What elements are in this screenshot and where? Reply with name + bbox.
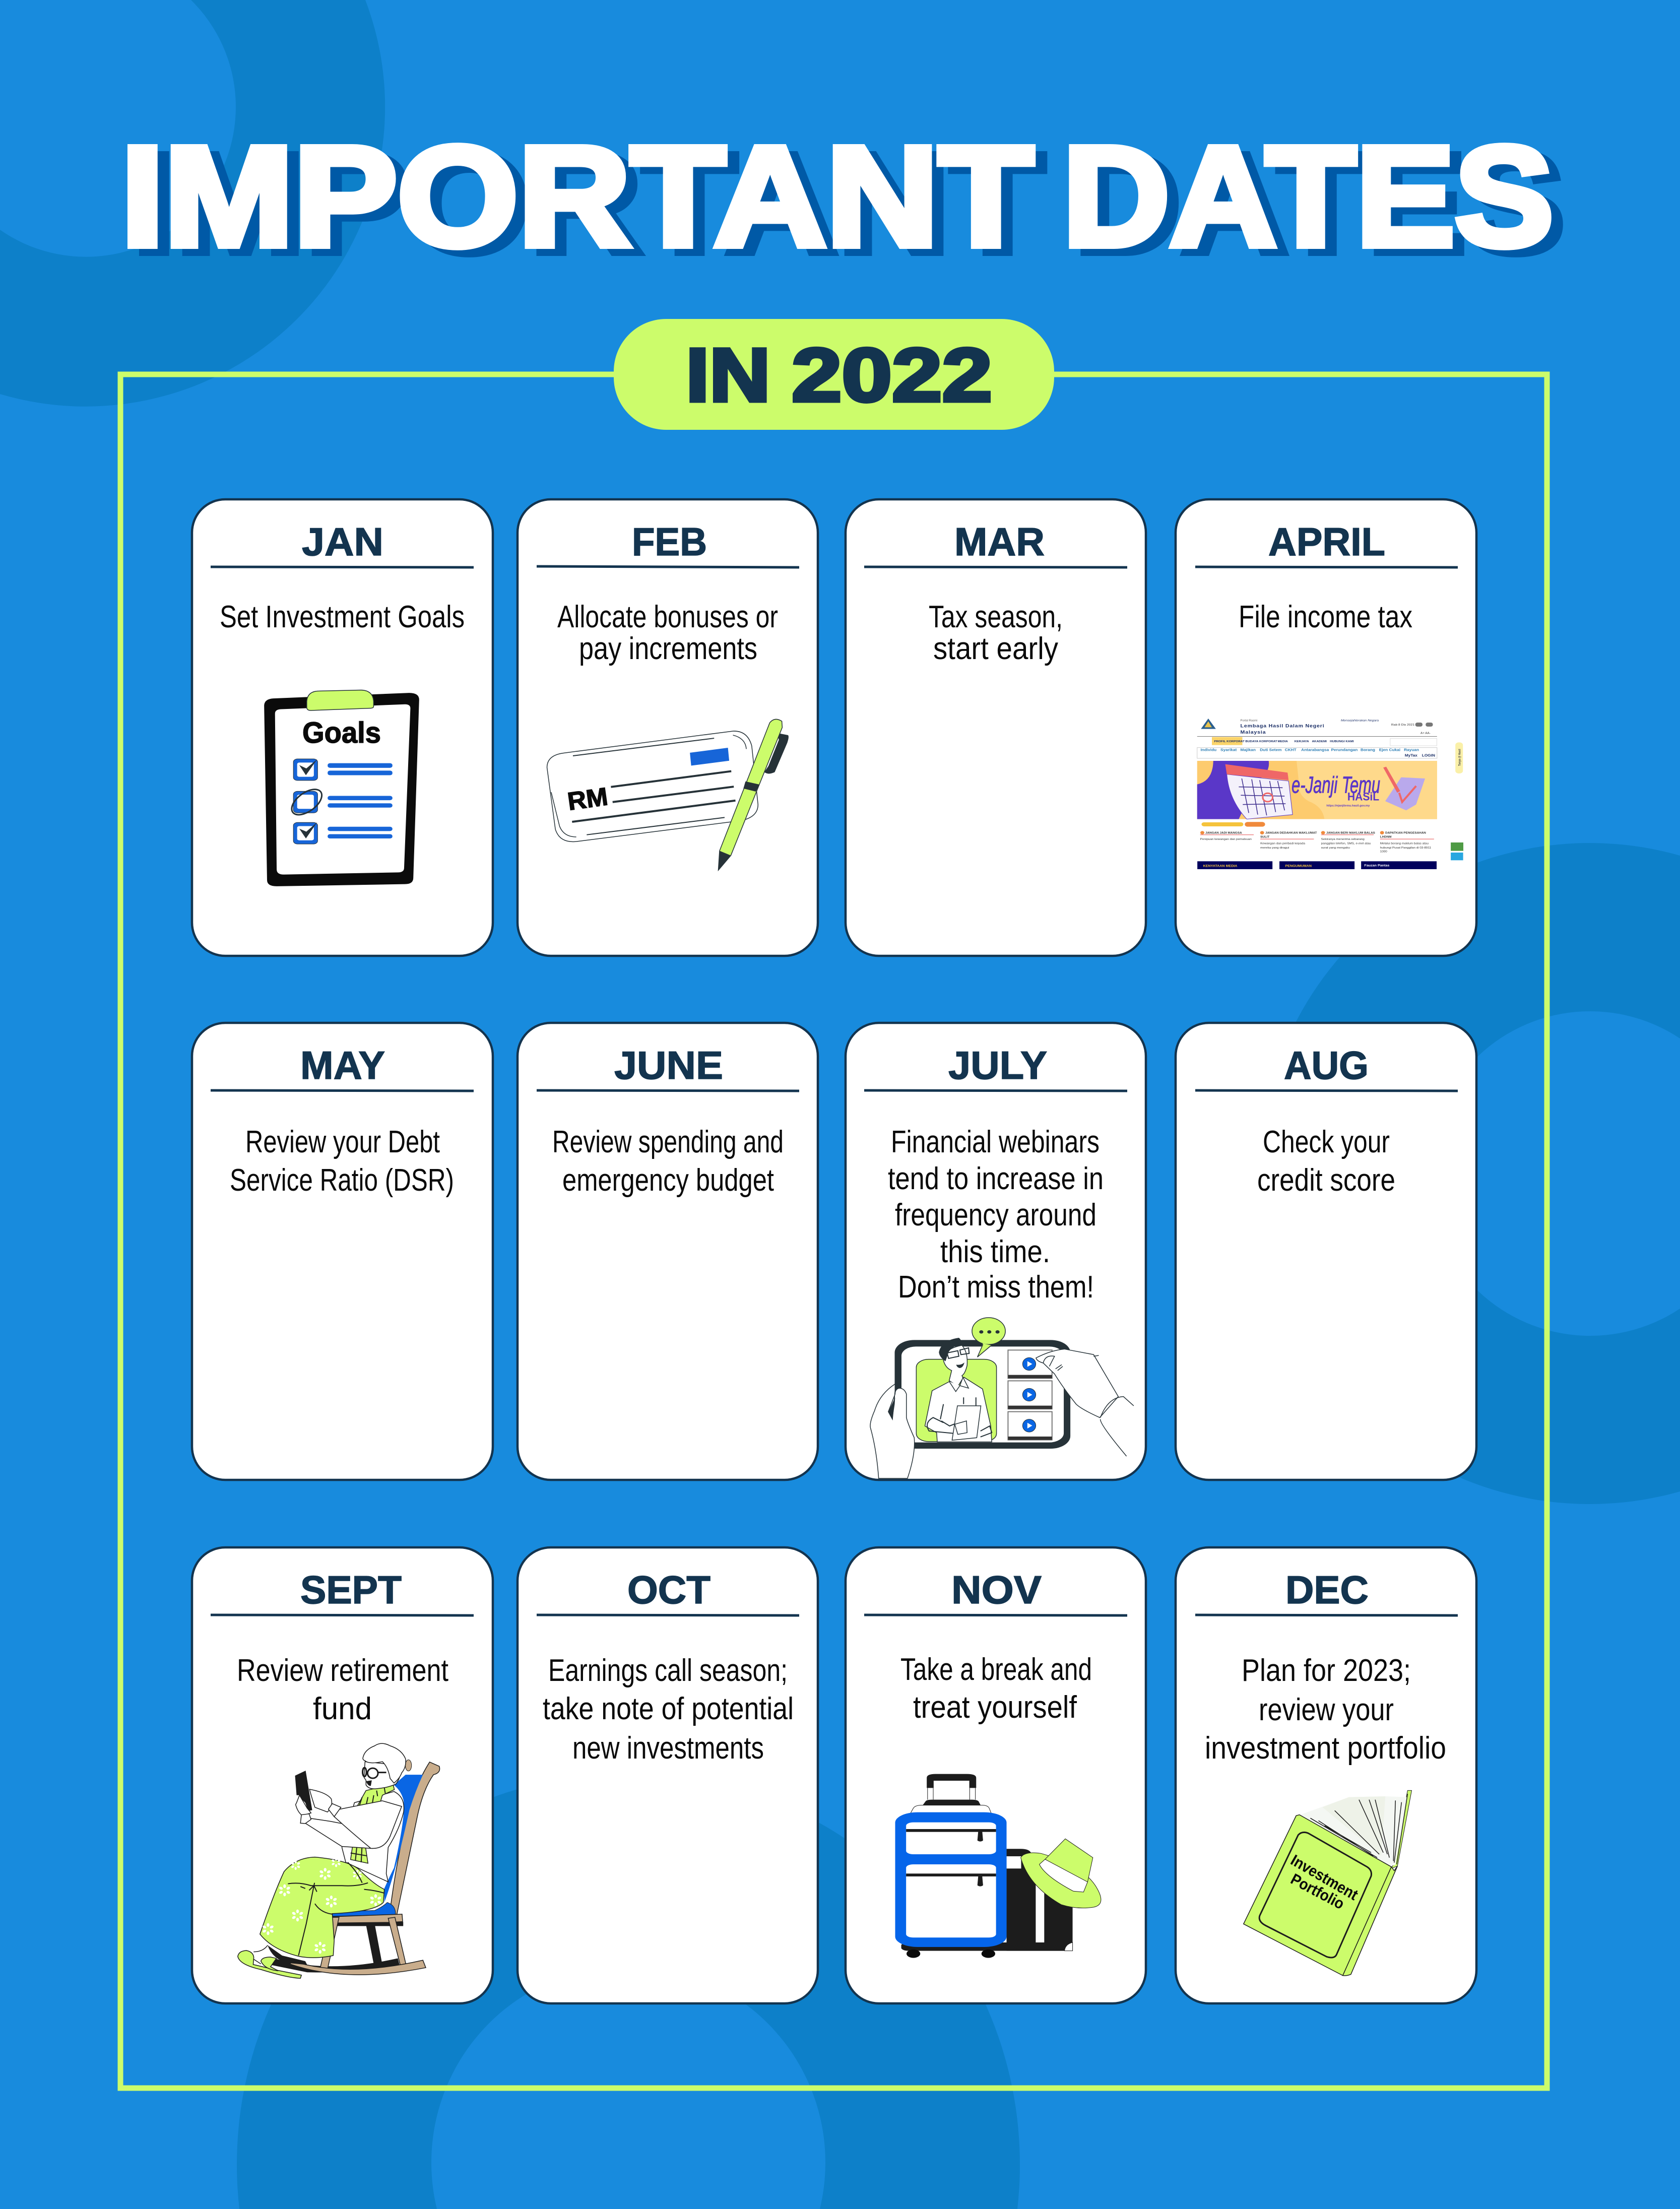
screenshot: LHDN website: Antarabangsa [1301, 748, 1329, 752]
text: financial webinars [888, 1125, 1104, 1305]
panel: SEPT [192, 1547, 493, 2003]
screenshot: LHDN website: JANGAN DEDAHKAN MAKLUMAT [1265, 832, 1317, 834]
screenshot: LHDN website: A+ AA- [1420, 732, 1431, 735]
text: credit score [1257, 1125, 1395, 1198]
screenshot: LHDN website [1197, 719, 1463, 869]
screenshot: LHDN website: Mensejahterakan Negara [1341, 719, 1379, 722]
text: financial webinars: this time. [940, 1235, 1050, 1269]
text: tax season [929, 600, 1063, 666]
panel: FEB [518, 499, 818, 956]
subtitle pill: in 2022: IN [686, 333, 770, 417]
heading: NOV: NOV [951, 1568, 1042, 1612]
text: take a break: Take a break and [900, 1652, 1092, 1687]
text: financial webinars: tend to increase in [888, 1161, 1104, 1196]
text: review spending: Review spending and [552, 1125, 784, 1159]
panel: NOV [846, 1547, 1146, 2003]
screenshot: LHDN website: LOGIN [1422, 753, 1435, 757]
screenshot: LHDN website: KENYATAAN MEDIA [1203, 865, 1238, 868]
screenshot: LHDN website: Individu [1200, 748, 1217, 752]
title: important dates: IMPORTANT [121, 117, 1033, 276]
screenshot: LHDN website: CKHT [1285, 748, 1297, 752]
heading: DEC: DEC [1285, 1568, 1369, 1612]
text: tax season: Tax season, [929, 600, 1063, 634]
screenshot: LHDN website: BUDAYA KORPORAT [1245, 740, 1277, 743]
text: debt service ratio: Service Ratio (DSR) [230, 1163, 454, 1198]
screenshot: LHDN website: PENGUMUMAN [1285, 865, 1312, 868]
decorative ring: top left [0, 0, 385, 407]
panel: MAY [192, 1023, 493, 1480]
text: plan for 2023: investment portfolio [1205, 1731, 1446, 1766]
heading: OCT: OCT [627, 1568, 710, 1612]
text: review retirement [237, 1653, 448, 1726]
heading: MAR: MAR [954, 519, 1045, 564]
text: earnings call season: new investments [572, 1731, 764, 1766]
text: debt service ratio: Review your Debt [245, 1125, 440, 1159]
screenshot: LHDN website: Penipuan kewangan dan pemalsuan [1200, 838, 1252, 841]
screenshot: LHDN website: Ejen Cukai [1379, 748, 1400, 752]
screenshot: LHDN website: JANGAN JADI MANGSA [1205, 832, 1242, 834]
screenshot: LHDN website: LHDNM [1380, 836, 1392, 838]
screenshot: LHDN website: Rab 8 Dis 2021 [1391, 723, 1415, 727]
panel: APRIL [1176, 499, 1476, 956]
text: review spending [552, 1125, 784, 1198]
icon: webinar on tablet [870, 1318, 1134, 1478]
panel: DEC [1176, 1547, 1476, 2003]
heading: JUNE: JUNE [614, 1043, 723, 1087]
screenshot: LHDN website: Tanya @ Hasil [1458, 749, 1462, 766]
title: important dates: DATES [1074, 124, 1565, 283]
screenshot: LHDN website: DAPATKAN PENGESAHAN [1385, 832, 1426, 834]
screenshot: LHDN website: Duti Setem [1260, 748, 1282, 752]
screenshot: LHDN website: Fauzan Pantas [1364, 864, 1390, 867]
icon: cheque and pen: RM [566, 782, 610, 816]
icon: investment portfolio book: Portfolio [1288, 1870, 1347, 1913]
screenshot: LHDN website: HASiL [1347, 791, 1379, 803]
screenshot: LHDN website: Majikan [1241, 748, 1256, 752]
title: important dates [121, 117, 1565, 283]
screenshot: LHDN website: KERJAYA [1295, 740, 1310, 743]
text: review retirement: fund [313, 1692, 372, 1726]
text: financial webinars: Don’t miss them! [898, 1270, 1094, 1305]
icon: luggage and hat [895, 1774, 1101, 1958]
screenshot: LHDN website: Borang [1361, 748, 1375, 752]
screenshot: LHDN website: Lembaga Hasil Dalam Negeri [1241, 724, 1324, 729]
heading: APRIL: APRIL [1268, 519, 1385, 564]
panel: OCT [518, 1547, 818, 2003]
text: financial webinars: Financial webinars [891, 1125, 1100, 1159]
text: credit score: credit score [1257, 1163, 1395, 1198]
icon: retiree in rocking chair [238, 1743, 440, 1978]
text: credit score: Check your [1263, 1125, 1390, 1159]
screenshot: LHDN website: surat yang mengaku [1321, 847, 1350, 850]
screenshot: LHDN website: HUBUNGI KAMI [1330, 740, 1354, 743]
screenshot: LHDN website: AKADEMI [1312, 740, 1327, 743]
text: tax season: start early [933, 631, 1058, 666]
decorative ring: right [1259, 843, 1680, 1504]
text: earnings call season: take note of potential [543, 1692, 794, 1726]
heading: AUG: AUG [1284, 1043, 1369, 1087]
screenshot: LHDN website: Malaysia [1241, 730, 1266, 735]
screenshot: LHDN website: MyTax [1405, 753, 1418, 757]
screenshot: LHDN website: panggilan telefon, SMS, e-mel atau [1321, 842, 1371, 845]
screenshot: LHDN website: Perundangan [1331, 748, 1358, 752]
screenshot: LHDN website: Rayuan [1404, 748, 1419, 752]
screenshot: LHDN website: MEDIA [1277, 740, 1288, 743]
text: take a break: treat yourself [913, 1690, 1077, 1725]
text: plan for 2023 [1205, 1653, 1446, 1766]
screenshot: LHDN website: PROFIL KORPORAT [1214, 740, 1245, 743]
screenshot: LHDN website: hubungi Pusat Panggilan di 03-8911 [1380, 847, 1431, 850]
screenshot: LHDN website: 1000 [1380, 851, 1388, 853]
text: review retirement: Review retirement [237, 1653, 448, 1688]
icon: cheque and pen [547, 719, 789, 870]
text: financial webinars: frequency around [895, 1198, 1096, 1232]
panel: JULY [846, 1023, 1146, 1480]
subtitle pill: in 2022 [614, 319, 1054, 430]
text: allocate bonuses [557, 600, 778, 666]
panel: JAN [192, 499, 493, 956]
text: file income tax: File income tax [1239, 600, 1412, 634]
text: plan for 2023: Plan for 2023; [1242, 1653, 1411, 1688]
panel: JUNE [518, 1023, 818, 1480]
heading: JULY: JULY [948, 1043, 1047, 1087]
subtitle pill: in 2022: 2022 [792, 333, 992, 417]
text: earnings call season [543, 1653, 794, 1766]
panel: MAR [846, 499, 1146, 956]
icon: investment portfolio book [1244, 1790, 1411, 1976]
heading: JAN: JAN [302, 519, 383, 564]
screenshot: LHDN website: e-Janji Temu [1291, 771, 1380, 798]
heading: SEPT: SEPT [300, 1568, 402, 1612]
screenshot: LHDN website: Syarikat [1220, 748, 1237, 752]
decorative ring: bottom [237, 1773, 1020, 2209]
screenshot: LHDN website: mereka yang diragui [1260, 847, 1289, 850]
text: allocate bonuses: pay increments [579, 631, 757, 666]
screenshot: LHDN website: Portal Rasmi [1241, 720, 1257, 722]
title: important dates: DATES [1063, 117, 1554, 276]
lime frame [120, 374, 1547, 2088]
icon: investment portfolio book: Investment [1288, 1851, 1361, 1904]
icon: goals clipboard: Goals [302, 717, 381, 749]
text: earnings call season: Earnings call season; [548, 1653, 788, 1688]
text: set investment goals: Set Investment Goals [220, 600, 465, 634]
title: important dates: IMPORTANT [133, 124, 1045, 283]
text: review spending: emergency budget [562, 1163, 774, 1198]
text: plan for 2023: review your [1259, 1693, 1394, 1727]
screenshot: LHDN website: https://ejanjitemu.hasil.gov.my [1326, 805, 1370, 807]
panel: AUG [1176, 1023, 1476, 1480]
screenshot: LHDN website: JANGAN BERI MAKLUM BALAS [1326, 832, 1375, 834]
text: debt service ratio [230, 1125, 454, 1198]
text: take a break [900, 1652, 1092, 1725]
screenshot: LHDN website: Kewangan dan peribadi kepada [1260, 842, 1306, 845]
icon: goals clipboard [264, 690, 419, 886]
screenshot: LHDN website: Melalui borang maklum balas atau [1380, 842, 1429, 845]
screenshot: LHDN website: SULIT [1260, 836, 1270, 838]
screenshot: LHDN website: Sekiranya menerima sebarang [1321, 838, 1365, 841]
heading: FEB: FEB [632, 519, 707, 564]
heading: MAY: MAY [300, 1043, 385, 1087]
text: allocate bonuses: Allocate bonuses or [557, 600, 778, 634]
